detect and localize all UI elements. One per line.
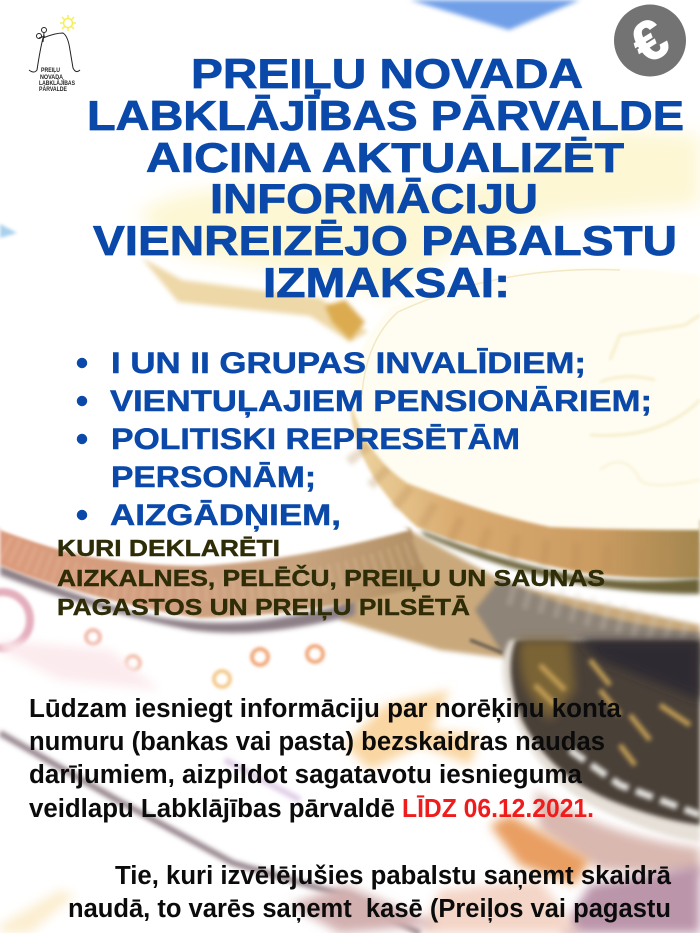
- text block: declared territories: [57, 535, 605, 620]
- logo text: LABKLĀJĪBAS: [39, 79, 76, 87]
- text block: request with deadline: Lūdzam iesniegt informāciju par norēķinu konta: [29, 695, 622, 723]
- left coin rim: [0, 565, 355, 633]
- logo: Preiļu novada Labklājības pārvalde: [29, 15, 80, 93]
- title: VIENREIZĒJO PABALSTU: [93, 217, 677, 264]
- text block: cash payment note: naudā, to varēs saņemt kasē (Preiļos vai pagastu: [68, 895, 671, 923]
- second coin wedge and lower rim: [340, 528, 700, 660]
- title: PREIĻU NOVADA: [191, 50, 583, 98]
- bullet list: recipients: PERSONĀM;: [111, 461, 316, 494]
- text block: request with deadline: darījumiem, aizpildot sagatavotu iesnieguma: [29, 761, 583, 789]
- bullet list: recipients: AIZGĀDŅIEM,: [110, 499, 341, 532]
- dark coin: [502, 640, 700, 842]
- text block: declared territories: AIZKALNES, PELĒČU, PREIĻU UN SAUNAS: [57, 564, 605, 591]
- logo text: [39, 67, 76, 93]
- banknote details: [0, 592, 323, 687]
- title: LABKLĀJĪBAS PĀRVALDE: [87, 92, 684, 139]
- text block: cash payment note: [68, 862, 672, 923]
- text block: request with deadline: LĪDZ 06.12.2021.: [402, 795, 594, 823]
- logo text: PĀRVALDE: [39, 85, 68, 93]
- bullet list: recipients: VIENTUĻAJIEM PENSIONĀRIEM;: [110, 385, 652, 418]
- logo text: NOVADA: [40, 74, 63, 81]
- icon: euro coin badge: €: [619, 6, 679, 76]
- text block: request with deadline: veidlapu Labklājības pārvaldē: [29, 795, 395, 823]
- bullet list: recipients: [77, 347, 652, 532]
- text block: declared territories: KURI DEKLARĒTI: [57, 535, 280, 561]
- icon: hill with climber: [29, 28, 80, 72]
- text block: cash payment note: Tie, kuri izvēlējušies pabalstu saņemt skaidrā: [115, 862, 672, 890]
- title: [87, 50, 684, 306]
- text block: declared territories: PAGASTOS UN PREIĻU PILSĒTĀ: [57, 594, 470, 620]
- orange shapes: [345, 690, 480, 770]
- diagonal streak: [0, 733, 420, 933]
- text block: request with deadline: [29, 695, 622, 823]
- bullet list: recipients: I UN II GRUPAS INVALĪDIEM;: [111, 347, 586, 380]
- title: INFORMĀCIJU: [210, 175, 538, 222]
- main coin: [350, 400, 700, 578]
- logo text: PREIĻU: [41, 67, 60, 74]
- text block: request with deadline: numuru (bankas vai pasta) bezskaidras naudas: [29, 728, 605, 756]
- icon: sun: [60, 15, 76, 31]
- title: IZMAKSAI:: [263, 259, 510, 306]
- title: AICINA AKTUALIZĒT: [146, 134, 624, 181]
- bullet list: recipients: POLITISKI REPRESĒTĀM: [111, 423, 520, 456]
